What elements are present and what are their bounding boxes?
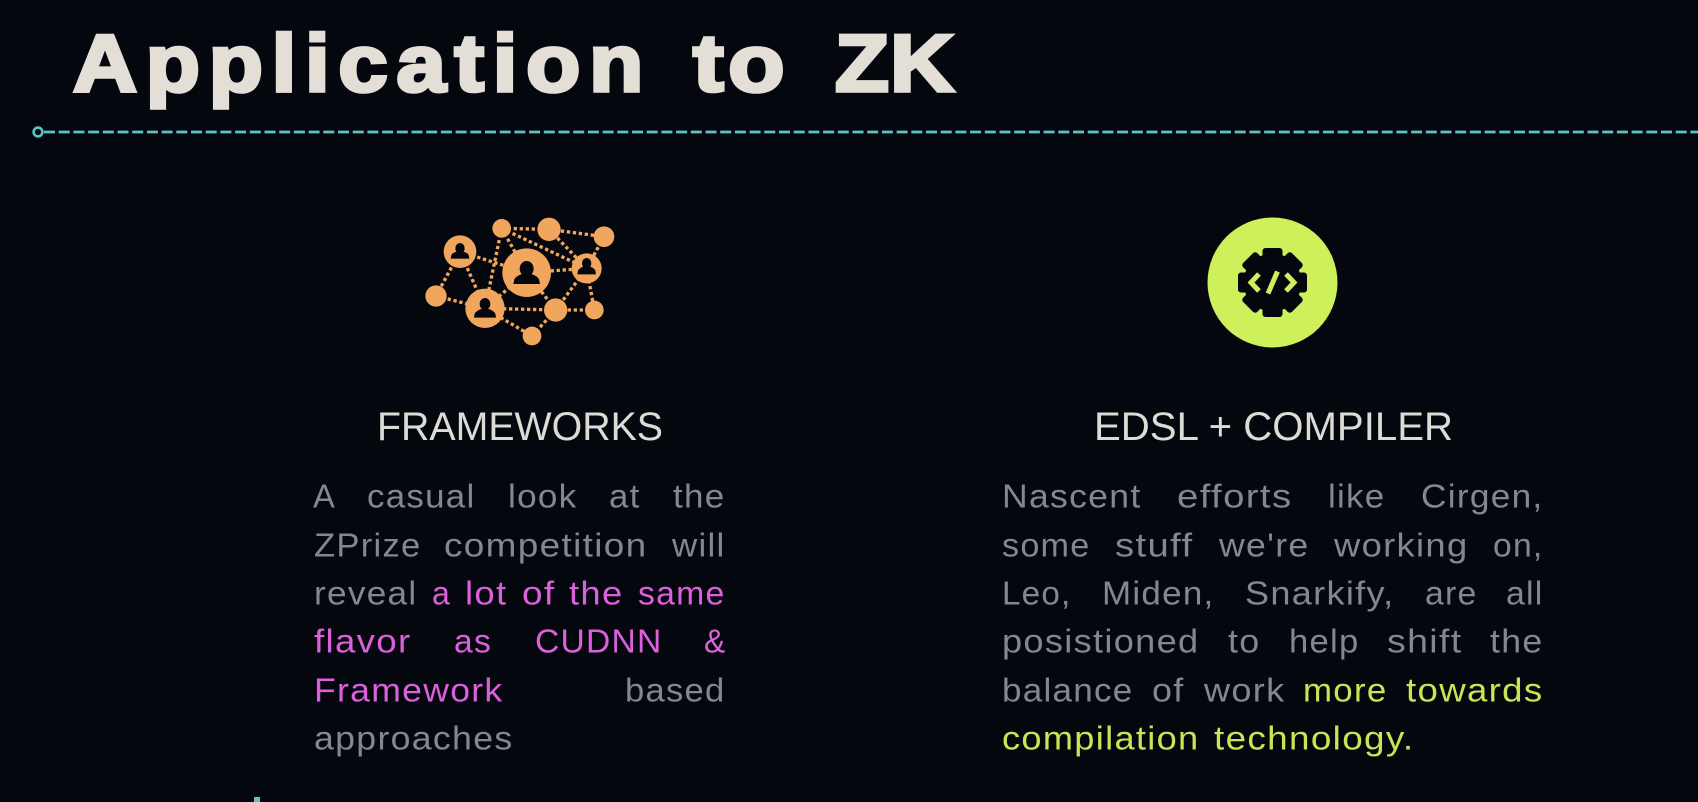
heading: edsl + compiler: EDSL + COMPILER — [1094, 405, 1453, 449]
text block: edsl + compiler description — [1002, 478, 1544, 757]
text block: frameworks description: A — [313, 478, 336, 515]
text block: frameworks description: lot — [465, 575, 508, 612]
text block: edsl + compiler description: are — [1425, 575, 1478, 612]
text block: frameworks description: CUDNN — [535, 623, 662, 660]
text block: edsl + compiler description: help — [1289, 623, 1360, 660]
icon: gear with code symbol — [1208, 218, 1338, 348]
text block: frameworks description: the — [569, 575, 624, 612]
text block: edsl + compiler description: like — [1328, 478, 1386, 515]
text block: frameworks description — [313, 478, 726, 757]
text block: edsl + compiler description: on, — [1493, 527, 1544, 564]
text block: edsl + compiler description: compilation — [1002, 720, 1200, 757]
text block: frameworks description: ZPrize — [314, 527, 422, 564]
text block: edsl + compiler description: we're — [1218, 527, 1310, 564]
text block: frameworks description: based — [625, 672, 726, 709]
title: to — [693, 19, 789, 109]
text block: edsl + compiler description: the — [1490, 623, 1544, 660]
text block: frameworks description: will — [671, 527, 726, 564]
text block: frameworks description: flavor — [314, 623, 412, 660]
text block: edsl + compiler description: work — [1203, 672, 1286, 709]
text block: frameworks description: look — [508, 478, 578, 515]
heading: frameworks: FRAMEWORKS — [377, 405, 663, 449]
text block: edsl + compiler description: posistioned — [1002, 623, 1200, 660]
text block: edsl + compiler description: Leo, — [1002, 575, 1072, 612]
text block: edsl + compiler description: of — [1152, 672, 1184, 709]
icon: network of people — [425, 218, 614, 345]
text block: edsl + compiler description: towards — [1406, 672, 1544, 709]
text block: frameworks description: casual — [367, 478, 476, 515]
text block: edsl + compiler description: Nascent — [1002, 478, 1142, 515]
title: Application — [73, 19, 652, 109]
partial cyan marker at bottom edge — [254, 797, 260, 802]
text block: edsl + compiler description: working — [1333, 527, 1468, 564]
title — [73, 19, 955, 109]
text block: frameworks description: of — [522, 575, 556, 612]
text block: frameworks description: & — [704, 623, 726, 660]
text block: frameworks description: the — [673, 478, 726, 515]
text block: edsl + compiler description: Snarkify, — [1245, 575, 1394, 612]
text block: frameworks description: Framework — [314, 672, 504, 709]
text block: edsl + compiler description: technology. — [1214, 720, 1414, 757]
text block: frameworks description: reveal — [314, 575, 418, 612]
text block: frameworks description: approaches — [314, 720, 514, 757]
text block: frameworks description: same — [638, 575, 726, 612]
text block: edsl + compiler description: Cirgen, — [1421, 478, 1544, 515]
text block: edsl + compiler description: all — [1506, 575, 1544, 612]
text block: edsl + compiler description: shift — [1387, 623, 1462, 660]
text block: edsl + compiler description: some — [1002, 527, 1090, 564]
text block: edsl + compiler description: to — [1228, 623, 1260, 660]
text block: edsl + compiler description: Miden, — [1102, 575, 1214, 612]
title: ZK — [835, 19, 955, 109]
text block: edsl + compiler description: stuff — [1115, 527, 1194, 564]
text block: frameworks description: a — [432, 575, 451, 612]
text block: frameworks description: as — [454, 623, 492, 660]
text block: frameworks description: at — [609, 478, 640, 515]
text block: edsl + compiler description: balance — [1002, 672, 1134, 709]
dashed divider with ring marker — [34, 128, 1698, 136]
text block: frameworks description: competition — [444, 527, 648, 564]
text block: edsl + compiler description: more — [1303, 672, 1388, 709]
text block: edsl + compiler description: efforts — [1177, 478, 1292, 515]
